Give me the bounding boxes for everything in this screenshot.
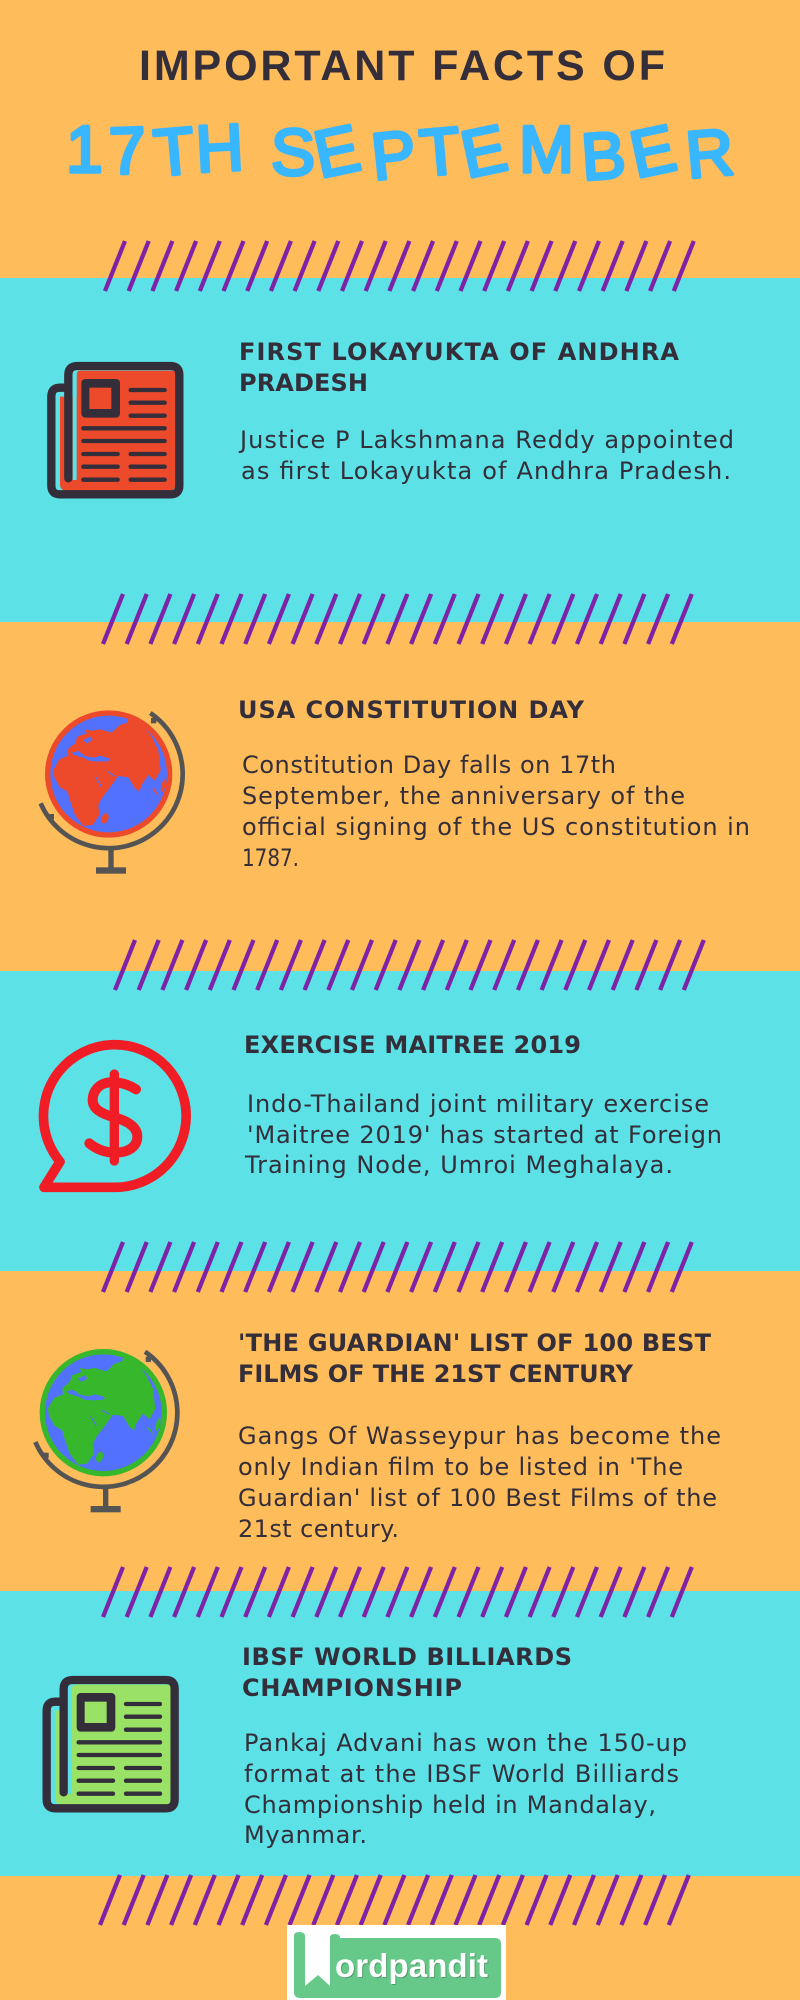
text: first lokayukta: Justice P Lakshmana Reddy appointed xyxy=(238,426,734,454)
hash divider 5 xyxy=(103,1567,692,1617)
text: usa constitution day xyxy=(238,696,750,872)
subtitle: date: 17TH SEPTEMBER xyxy=(66,110,737,194)
text: billiards championship xyxy=(242,1643,687,1849)
text: first lokayukta xyxy=(238,338,734,485)
hash divider 2 xyxy=(103,594,692,644)
text: usa constitution day: Constitution Day falls on 17th xyxy=(242,751,616,779)
text: guardian list: only Indian film to be listed in 'The xyxy=(238,1453,683,1481)
logo: wordpandit: ordpandit xyxy=(335,1947,488,1984)
text: billiards championship: Pankaj Advani has won the 150-up xyxy=(244,1729,687,1757)
hash divider 3 xyxy=(115,940,704,990)
text: billiards championship: Championship held in Mandalay, xyxy=(244,1791,656,1819)
text: billiards championship: Myanmar. xyxy=(244,1821,367,1849)
text: exercise maitree: EXERCISE MAITREE 2019 xyxy=(244,1031,581,1059)
text: usa constitution day: September, the anniversary of the xyxy=(242,782,685,810)
text: billiards championship: format at the IBSF World Billiards xyxy=(244,1760,679,1788)
panel: exercise maitree background xyxy=(0,971,800,1271)
text: guardian list: 21st century. xyxy=(238,1515,399,1543)
text: exercise maitree: Indo-Thailand joint military exercise xyxy=(247,1090,709,1118)
text: exercise maitree xyxy=(244,1031,722,1179)
panel: first lokayukta background xyxy=(0,278,800,622)
text: exercise maitree: 'Maitree 2019' has started at Foreign xyxy=(247,1121,722,1149)
text: guardian list: 'THE GUARDIAN' LIST OF 100 BEST xyxy=(238,1329,712,1357)
text: usa constitution day: official signing of the US constitution in xyxy=(242,813,750,841)
text: guardian list: FILMS OF THE 21ST CENTURY xyxy=(238,1360,634,1388)
logo: wordpandit xyxy=(287,1925,506,2000)
panel: constitution day background xyxy=(0,622,800,971)
panel: billiards background xyxy=(0,1591,800,1876)
text: billiards championship: CHAMPIONSHIP xyxy=(242,1674,462,1702)
icon: dollar speech bubble xyxy=(43,1045,186,1187)
hash divider 1 xyxy=(105,241,694,291)
text: usa constitution day: 1787. xyxy=(242,844,299,872)
hash divider 4 xyxy=(103,1242,692,1292)
icon: red newspaper xyxy=(51,366,179,494)
text: exercise maitree: Training Node, Umroi Meghalaya. xyxy=(244,1151,673,1179)
title: IMPORTANT FACTS OF xyxy=(139,42,665,90)
text: first lokayukta: PRADESH xyxy=(239,369,368,397)
text: guardian list xyxy=(238,1329,721,1543)
panel: footer background xyxy=(0,1876,800,2000)
text: guardian list: Gangs Of Wasseypur has become the xyxy=(238,1422,721,1450)
icon: red globe xyxy=(41,713,183,874)
icon: green newspaper xyxy=(47,1680,175,1808)
text: usa constitution day: USA CONSTITUTION DAY xyxy=(238,696,585,724)
text: guardian list: Guardian' list of 100 Best Films of the xyxy=(238,1484,717,1512)
panel: background header xyxy=(0,0,800,278)
panel: guardian list background xyxy=(0,1271,800,1591)
text: billiards championship: IBSF WORLD BILLIARDS xyxy=(242,1643,572,1671)
text: first lokayukta: as first Lokayukta of Andhra Pradesh. xyxy=(241,457,731,485)
text: first lokayukta: FIRST LOKAYUKTA OF ANDHRA xyxy=(239,338,679,366)
hash divider 6 xyxy=(100,1875,689,1925)
icon: green globe xyxy=(35,1352,177,1512)
